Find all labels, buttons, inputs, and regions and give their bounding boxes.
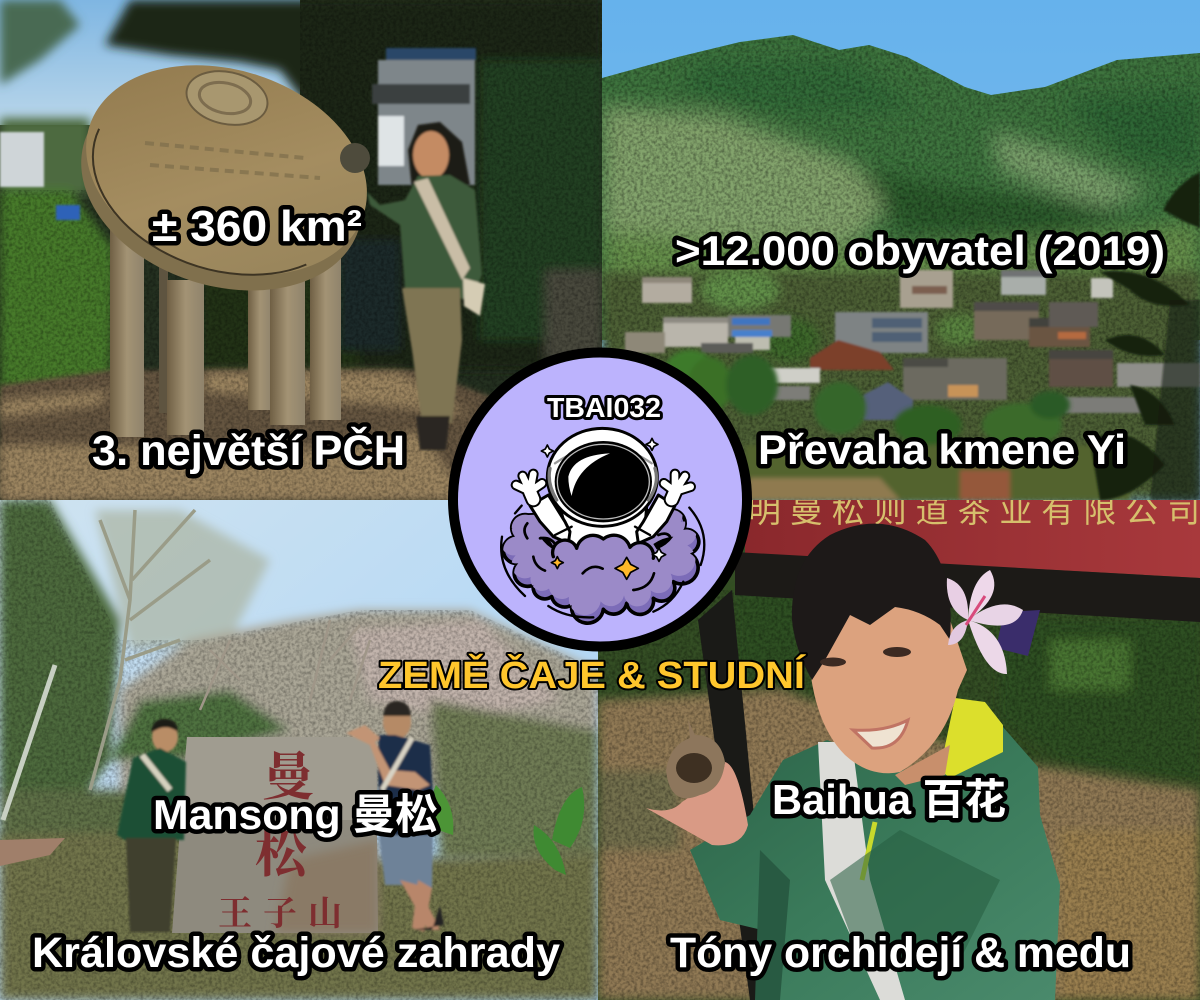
sign post xyxy=(698,590,758,1000)
heading: Země čaje a studní: ZEMĚ ČAJE & STUDNÍ xyxy=(378,652,807,697)
foreground dark foliage xyxy=(1090,172,1200,500)
banana leaves xyxy=(533,787,584,875)
caption: area: ± 360 km² xyxy=(152,202,362,251)
disc xyxy=(81,65,367,290)
stone inscription xyxy=(219,750,340,928)
icon: astronaut in purple cloud xyxy=(501,428,704,623)
caption: Mansong: Mansong 曼松 xyxy=(153,791,438,838)
stone inscription: 松 xyxy=(255,812,311,887)
stone inscription: 曼 xyxy=(262,735,314,810)
badge code label: TBAI032 xyxy=(547,392,661,423)
caption: Yi majority: Převaha kmene Yi xyxy=(758,426,1126,473)
panel: mountain village photo xyxy=(602,0,1200,500)
woman left xyxy=(117,719,186,932)
rear cloud xyxy=(501,502,699,623)
banner xyxy=(745,500,1200,578)
caption: population: >12.000 obyvatel (2019) xyxy=(675,227,1165,274)
caption: royal tea gardens: Královské čajové zahrady xyxy=(32,929,560,977)
woman jacket xyxy=(690,698,1060,1000)
stone inscription: 子 xyxy=(263,886,297,935)
houses xyxy=(625,270,1200,420)
face and hair xyxy=(792,524,967,773)
cloud curls xyxy=(524,523,670,590)
caption: flavour notes: Tóny orchidejí & medu xyxy=(670,929,1131,977)
building xyxy=(0,48,476,220)
stone inscription: 王 xyxy=(218,886,252,935)
badge: TBAI032 astronaut logo xyxy=(453,352,747,646)
ground xyxy=(0,368,490,500)
caption: Baihua: Baihua 百花 xyxy=(772,776,1006,823)
stone inscription: 山 xyxy=(308,886,342,935)
torso xyxy=(560,507,647,547)
caption: third largest: 3. největší PČH xyxy=(92,426,405,475)
sparkles xyxy=(541,438,666,579)
panel: stone monument photo xyxy=(0,0,602,500)
helmet xyxy=(547,428,657,526)
hibiscus flower xyxy=(947,570,1023,674)
hand with nest xyxy=(646,720,748,845)
woman xyxy=(367,122,485,450)
front cloud xyxy=(553,535,654,585)
panel: Mansong stone photo xyxy=(0,500,598,1000)
banner lettering: 明曼松则道茶业有限公司 xyxy=(748,484,1200,532)
stone block xyxy=(172,735,378,935)
motion lines xyxy=(501,506,704,617)
panel: Baihua portrait photo xyxy=(598,484,1200,1000)
trees xyxy=(664,350,1130,500)
man right xyxy=(346,701,444,932)
gloves xyxy=(516,474,691,499)
pillars xyxy=(110,225,341,437)
arms xyxy=(530,495,570,543)
